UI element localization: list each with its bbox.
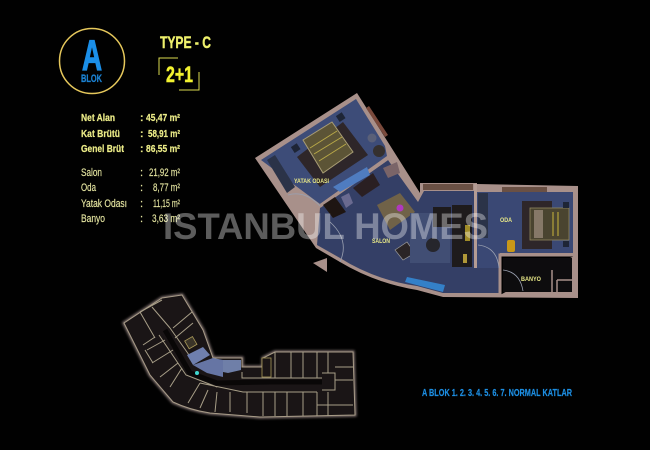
wall: salon and oda	[474, 184, 477, 268]
key plan partition lines	[140, 300, 353, 416]
stair core right	[262, 358, 271, 377]
area summary table: 86,55 m²	[146, 143, 180, 155]
armchair	[507, 240, 515, 252]
type heading: TYPE - C	[160, 34, 211, 52]
room labels: YATAK ODASI	[294, 178, 329, 185]
room labels: ODA	[500, 217, 512, 224]
entrance triangle	[313, 258, 327, 272]
block badge: A	[82, 32, 102, 80]
room areas table: 3,63 m²	[152, 213, 180, 225]
room areas table: Yatak Odası	[81, 198, 127, 210]
room areas table: :	[140, 198, 143, 210]
room labels	[294, 178, 541, 283]
salon tv unit	[405, 277, 445, 292]
area summary table: Kat Brütü	[81, 128, 120, 140]
bedroom floor	[261, 99, 387, 204]
room labels: BANYO	[521, 276, 541, 283]
floors caption: A BLOK 1. 2. 3. 4. 5. 6. 7. NORMAL KATLAR	[422, 387, 572, 399]
kitchen units	[323, 162, 400, 218]
area summary table	[81, 112, 180, 155]
bedroom carpet	[297, 122, 368, 187]
room areas table: 11,15 m²	[153, 198, 180, 210]
area summary table: :	[140, 112, 144, 124]
room areas table: :	[140, 213, 143, 225]
room areas table	[81, 167, 180, 225]
bathroom	[503, 258, 572, 292]
watermark: ISTANBUL HOMES	[163, 205, 488, 247]
area summary table: 58,91 m²	[148, 128, 180, 140]
footprint glow	[124, 295, 355, 417]
bedroom wardrobe	[267, 155, 295, 193]
room areas table: :	[140, 182, 143, 194]
oda floor	[477, 192, 573, 268]
room areas table: 21,92 m²	[149, 167, 180, 179]
oda wardrobe	[478, 193, 488, 238]
balconies	[423, 184, 473, 190]
area summary table: :	[140, 143, 144, 155]
room areas table: Oda	[81, 182, 97, 194]
area summary table: Genel Brüt	[81, 143, 124, 155]
room areas table: 8,77 m²	[153, 182, 180, 194]
key plan of floor	[124, 295, 355, 417]
block badge: BLOK	[81, 73, 102, 85]
apartment floor plan	[255, 93, 578, 298]
building footprint	[124, 295, 355, 417]
stair core	[185, 337, 197, 349]
room areas table: Salon	[81, 167, 102, 179]
wall: oda and bath	[500, 255, 576, 295]
area summary table: Net Alan	[81, 112, 115, 124]
salon floor	[317, 160, 500, 293]
bedroom bed	[291, 112, 385, 173]
area summary table: :	[140, 128, 144, 140]
door swings	[288, 194, 523, 291]
highlighted unit	[187, 347, 241, 377]
room labels: SALON	[372, 238, 390, 245]
area summary table: 45,47 m²	[146, 112, 180, 124]
oda carpet and bed	[522, 201, 569, 249]
unit type badge: 2+1	[166, 62, 193, 87]
room areas table: :	[140, 167, 143, 179]
corridor	[165, 330, 322, 383]
unit type badge	[159, 58, 199, 90]
elevator marker	[195, 371, 199, 375]
dining table	[377, 193, 415, 260]
outer walls	[255, 93, 578, 298]
wall: bedroom and salon	[320, 158, 388, 206]
room areas table: Banyo	[81, 213, 105, 225]
salon rug and sofa	[410, 205, 472, 267]
block badge	[60, 28, 124, 94]
